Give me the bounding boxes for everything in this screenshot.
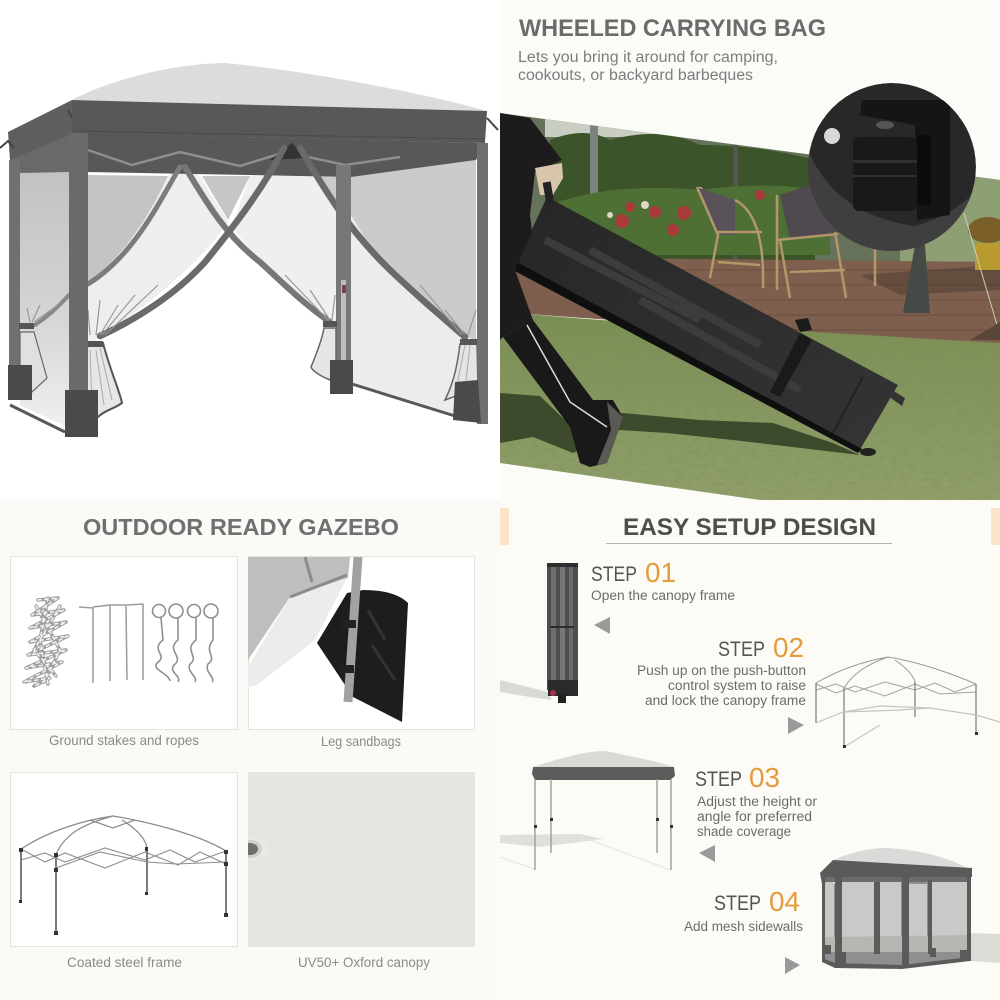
grass texture: [512, 320, 720, 494]
step 4 text: [684, 886, 803, 934]
left underside: [9, 135, 69, 173]
heading: outdoor ready gazebo: OUTDOOR READY GAZEBO: [83, 514, 399, 540]
ground shadow: [500, 393, 860, 455]
caption: canopy: UV50+ Oxford canopy: [298, 955, 430, 970]
front valance: [72, 100, 487, 143]
panel: top-left gazebo background: [0, 0, 500, 500]
step 4 text: Add mesh sidewalls: [684, 919, 803, 934]
gazebo product illustration: [0, 63, 498, 437]
step 3 text: angle for preferred: [697, 809, 812, 824]
flower bed: [550, 185, 830, 255]
arrow: step 3: [699, 845, 715, 862]
step 3 text: [695, 762, 818, 839]
left side valance: [8, 100, 72, 160]
scissor trusses: [21, 848, 226, 868]
step 2 text: and lock the canopy frame: [645, 693, 806, 708]
back pole: [336, 165, 351, 390]
panel: bottom-left accessories background: [0, 500, 500, 1000]
step 2 illustration: raised frame: [816, 657, 1000, 748]
under roof frame: [87, 133, 485, 177]
step 2 text: Push up on the push-button: [637, 663, 806, 678]
corner tabs: [0, 110, 498, 148]
step 2 text: STEP: [718, 638, 765, 661]
heading: easy setup design: EASY SETUP DESIGN: [623, 514, 876, 541]
carrying bag: [513, 197, 905, 456]
left pole: [9, 160, 20, 400]
gathered curtains: [19, 275, 478, 422]
roof arcs: [21, 816, 226, 854]
rivet: [824, 128, 840, 144]
sandbag: [317, 590, 408, 722]
arrow: step 2: [788, 717, 804, 734]
caption: coated steel frame: Coated steel frame: [67, 955, 182, 970]
wheel bracket: [860, 100, 950, 220]
front left pole: [69, 133, 88, 437]
right background lawn: [900, 175, 1000, 265]
step 1 text: STEP: [591, 563, 637, 586]
card: ground stakes and ropes: [10, 556, 238, 730]
post and pot: [903, 245, 930, 313]
inset: wheel close-up: [808, 83, 976, 252]
caption: ground stakes and ropes: Ground stakes and ropes: [49, 733, 199, 748]
steel leg: [348, 557, 358, 702]
corner tab right: [991, 508, 1000, 545]
icon: rope coil: [24, 598, 68, 686]
step 4 text: 04: [769, 886, 800, 917]
canopy fabric: [248, 557, 350, 660]
photo: person pulling bag: [500, 110, 1000, 500]
step 3 text: 03: [749, 762, 780, 793]
panel: top-right carrying bag background: [500, 0, 1000, 500]
icon: L-shaped stakes: [79, 604, 143, 683]
step 3 text: shade coverage: [697, 824, 791, 839]
card: coated steel frame: [10, 772, 238, 946]
icon: spiral anchors: [152, 604, 218, 682]
step 4 text: STEP: [714, 892, 761, 915]
mesh bottom borders: [10, 384, 455, 432]
right pole: [477, 143, 488, 424]
step 2 text: [637, 632, 806, 708]
card: canopy fabric close-up: [236, 772, 475, 947]
arrow: step 1: [594, 617, 610, 634]
curtain tie bands: [35, 148, 465, 337]
step 3 text: STEP: [695, 768, 742, 791]
step 2 text: control system to raise: [668, 678, 806, 693]
backdrop fence and plants: [500, 110, 1000, 270]
step 3 illustration: canopy on legs: [500, 751, 675, 870]
grommet: [236, 837, 268, 861]
mesh walls: [20, 160, 476, 428]
woven fabric band: [808, 150, 976, 252]
legs: [21, 848, 226, 932]
person: [500, 113, 623, 467]
canopy roof: [72, 63, 487, 111]
arrow: step 4: [785, 957, 800, 974]
panel: bottom-right setup background: [500, 500, 1000, 1000]
leg sandbags: [8, 360, 481, 437]
step 4 illustration: gazebo with mesh walls: [820, 848, 1000, 969]
heading: wheeled carrying bag: WHEELED CARRYING BAG: [519, 15, 826, 42]
step 1 text: [591, 557, 735, 603]
text: carrying bag description: Lets you bring it around for camping,: [518, 49, 778, 66]
grass: [500, 312, 1000, 500]
corner tab left: [500, 508, 509, 545]
wheel: [853, 137, 917, 211]
step 1 text: 01: [645, 557, 676, 588]
caption: leg sandbags: Leg sandbags: [321, 734, 401, 749]
step 1 text: Open the canopy frame: [591, 588, 735, 603]
step 3 text: Adjust the height or: [697, 794, 818, 809]
card: leg sandbags: [248, 556, 474, 730]
step 1 illustration: folded frame: [500, 563, 578, 703]
step 2 text: 02: [773, 632, 804, 663]
chairs: [697, 185, 875, 298]
wooden deck: [500, 257, 1000, 345]
text: carrying bag description: cookouts, or backyard barbeques: [518, 67, 753, 84]
